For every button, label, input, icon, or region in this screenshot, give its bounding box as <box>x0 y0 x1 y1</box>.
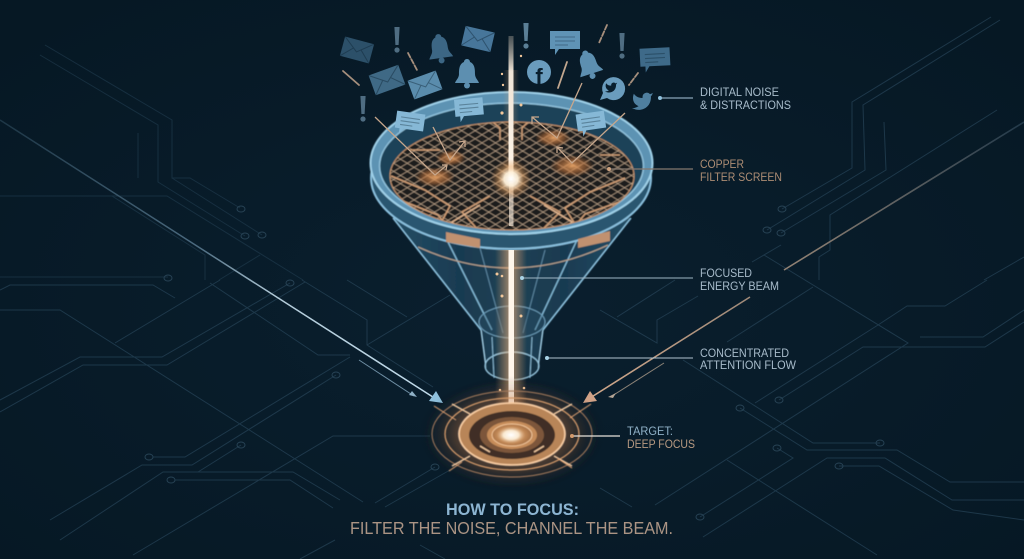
title: HOW TO FOCUS: <box>446 500 579 519</box>
label: digital noise and distractions: & DISTRACTIONS <box>700 100 791 112</box>
copper filter screen <box>390 118 634 240</box>
label: target deep focus: DEEP FOCUS <box>627 439 695 451</box>
icon: twitter bird <box>632 93 653 110</box>
funnel cone body <box>393 218 631 380</box>
title: FILTER THE NOISE, CHANNEL THE BEAM. <box>350 518 673 538</box>
noise icons <box>340 23 671 137</box>
label: target deep focus: TARGET: <box>627 426 673 438</box>
label: concentrated attention flow: CONCENTRATED <box>700 348 789 360</box>
focused energy beam <box>491 36 531 432</box>
icon: envelopes <box>340 26 495 100</box>
label: copper filter screen <box>607 159 782 184</box>
icon: noise sparks <box>343 25 638 88</box>
impact arrows on screen <box>375 83 625 187</box>
icon: exclamation marks <box>360 23 625 122</box>
arrow: right copper arrow into target <box>583 122 1024 403</box>
label: concentrated attention flow <box>545 348 796 372</box>
label: focused energy beam <box>520 268 779 293</box>
target: deep focus rings <box>418 376 606 492</box>
label: digital noise and distractions: DIGITAL NOISE <box>700 87 779 99</box>
title <box>350 500 673 538</box>
label: copper filter screen: FILTER SCREEN <box>700 172 782 184</box>
arrow: left blue arrow into target <box>0 120 443 403</box>
label: target deep focus <box>570 426 695 451</box>
sparks <box>496 55 525 391</box>
icon: twitter bubble <box>600 77 625 100</box>
label: focused energy beam: FOCUSED <box>700 268 752 280</box>
label: copper filter screen: COPPER <box>700 159 744 171</box>
funnel rim <box>370 92 652 249</box>
icon: chat bubbles <box>394 31 671 137</box>
label: concentrated attention flow: ATTENTION FLOW <box>700 360 796 372</box>
label: digital noise and distractions <box>658 87 791 112</box>
icon: facebook: f <box>535 64 543 89</box>
label: focused energy beam: ENERGY BEAM <box>700 281 779 293</box>
icon: facebook <box>527 60 551 89</box>
icon: bells <box>426 32 605 88</box>
funnel <box>370 92 652 380</box>
